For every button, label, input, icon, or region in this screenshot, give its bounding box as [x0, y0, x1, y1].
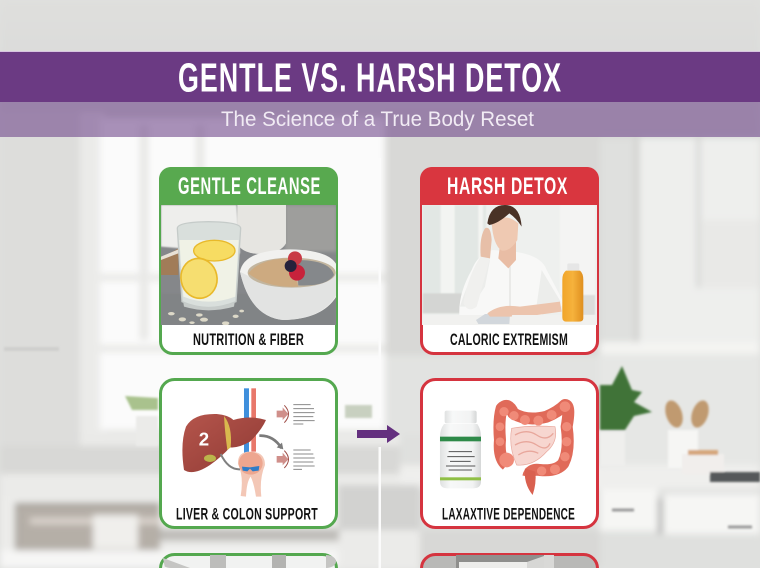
- header band: [0, 51, 760, 102]
- panel: harsh detox, caloric extremism: [420, 167, 599, 354]
- header: harsh detox: HARSH DETOX: [447, 173, 568, 200]
- caption: liver and colon support: LIVER & COLON SUPPORT: [176, 504, 318, 524]
- title: GENTLE VS. HARSH DETOX: [178, 54, 562, 100]
- center divider: [378, 158, 381, 568]
- panel: third gentle card, cropped: [160, 554, 336, 568]
- caption: laxative dependence: LAXAXTIVE DEPENDENCE: [442, 504, 575, 524]
- illustration: liver and colon: 2: [199, 428, 209, 449]
- photo: tired woman with juice: [422, 205, 597, 326]
- photo: window view: [163, 555, 336, 568]
- caption: nutrition and fiber: NUTRITION & FIBER: [193, 330, 304, 349]
- header: gentle cleanse: [159, 167, 338, 205]
- panel: third harsh card, cropped: [422, 554, 598, 568]
- illustration: liver and colon: [182, 388, 315, 497]
- caption: caloric extremism: CALORIC EXTREMISM: [450, 330, 568, 349]
- subtitle: The Science of a True Body Reset: [221, 108, 534, 131]
- subtitle band: [0, 102, 760, 137]
- header: gentle cleanse: GENTLE CLEANSE: [178, 173, 321, 200]
- panel: liver and colon support: [160, 380, 336, 528]
- photo: lemon water and fiber bowl: [161, 205, 337, 325]
- illustration: supplement bottle and colon: [440, 401, 571, 495]
- arrow: gentle to harsh: [357, 425, 400, 443]
- panel: gentle cleanse, nutrition and fiber: [159, 167, 338, 354]
- photo: open cabinet: [456, 555, 554, 568]
- header: harsh detox: [420, 167, 599, 205]
- panel: laxative dependence: [422, 380, 598, 528]
